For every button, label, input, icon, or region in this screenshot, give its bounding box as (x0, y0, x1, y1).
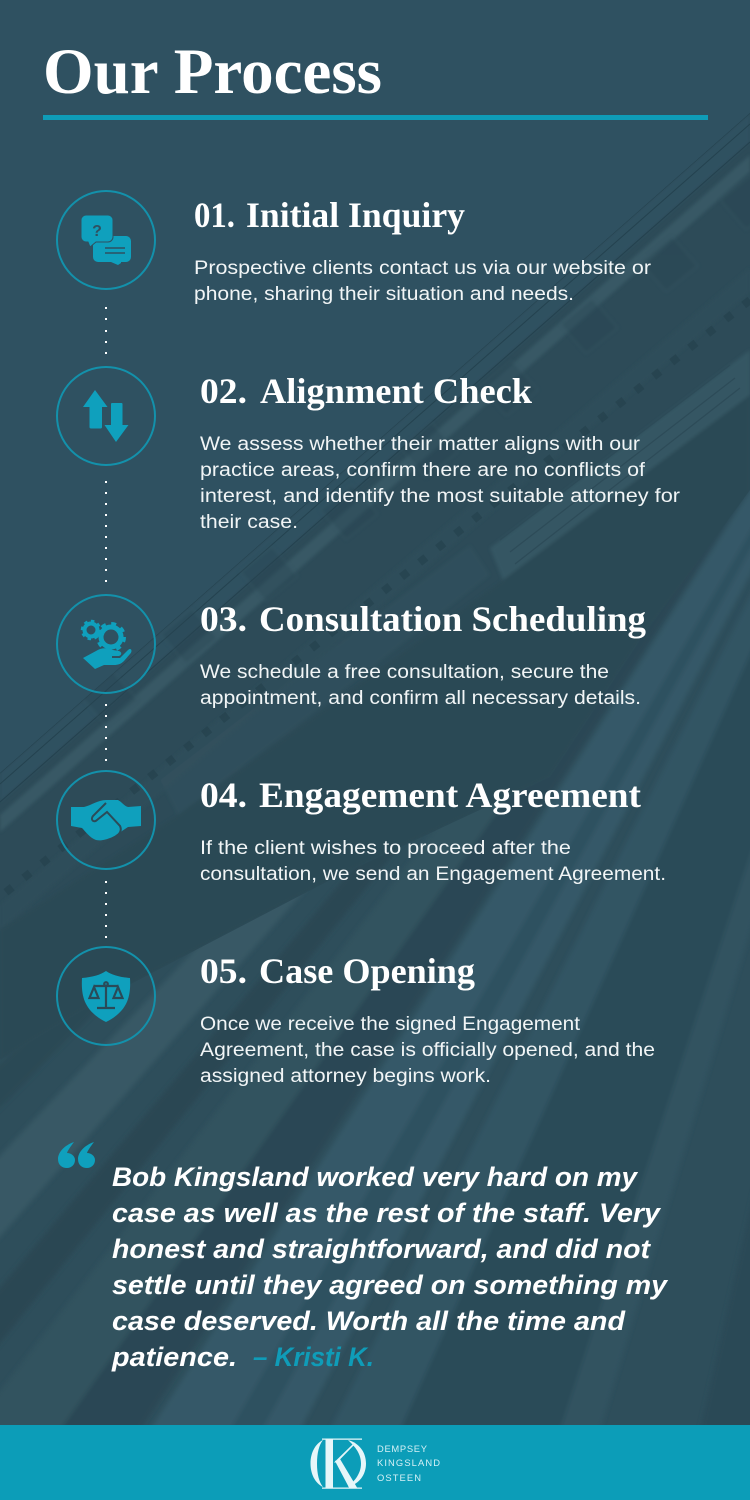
text 4: If the client wishes to proceed after the (200, 837, 571, 859)
text 2: We assess whether their matter aligns with our (200, 433, 641, 455)
text 4: consultation, we send an Engagement Agreement. (200, 863, 666, 885)
testimonial quote: honest and straightforward, and did not (112, 1234, 651, 1264)
step 1 (57, 191, 652, 305)
text 2: practice areas, confirm there are no conflicts of (200, 459, 646, 481)
heading 1: Initial Inquiry (246, 195, 465, 235)
text 4 (200, 837, 666, 885)
text 3: appointment, and confirm all necessary details. (200, 687, 641, 709)
heading 2: 02. (200, 371, 247, 411)
text 1: phone, sharing their situation and needs. (194, 283, 574, 305)
timeline dots (105, 307, 107, 938)
icon: speech bubbles: ? (92, 223, 102, 240)
text 3 (200, 661, 641, 709)
logo wordmark: DEMPSEY (377, 1443, 428, 1454)
title: Our Process (43, 36, 382, 108)
text 5: Agreement, the case is officially opened, and the (200, 1039, 655, 1061)
quote attribution: – Kristi K. (253, 1342, 374, 1372)
logo (310, 1438, 440, 1489)
heading 5: 05. (200, 951, 247, 991)
heading 3: 03. (200, 599, 247, 639)
logo wordmark: KINGSLAND (377, 1457, 440, 1468)
testimonial quote: case as well as the rest of the staff. Very (112, 1198, 662, 1228)
step 4 (57, 771, 666, 885)
icon: gears in hand (57, 595, 155, 693)
text 2: interest, and identify the most suitable attorney for (200, 485, 681, 507)
text 1: Prospective clients contact us via our website or (194, 257, 652, 279)
step 3 (57, 595, 646, 709)
testimonial quote (111, 1162, 669, 1372)
text 2 (200, 433, 681, 533)
testimonial quote: patience. (111, 1342, 237, 1372)
testimonial quote: case deserved. Worth all the time and (112, 1306, 626, 1336)
text 1 (194, 257, 652, 305)
icon: handshake (57, 771, 155, 869)
logo wordmark: OSTEEN (377, 1472, 421, 1483)
icon: quotation mark (58, 1142, 95, 1168)
step 2 (57, 367, 681, 533)
testimonial quote: Bob Kingsland worked very hard on my (112, 1162, 639, 1192)
logo wordmark (377, 1443, 440, 1483)
text 3: We schedule a free consultation, secure the (200, 661, 609, 683)
testimonial quote: settle until they agreed on something my (112, 1270, 669, 1300)
heading 3: Consultation Scheduling (259, 599, 646, 639)
heading 2: Alignment Check (260, 371, 532, 411)
icon: shield with scales (57, 947, 155, 1045)
icon: speech bubbles (57, 191, 155, 289)
text 2: their case. (200, 511, 298, 533)
text 5: Once we receive the signed Engagement (200, 1013, 581, 1035)
heading 4: Engagement Agreement (259, 775, 641, 815)
step 5 (57, 947, 655, 1087)
title rule (43, 115, 708, 120)
logo mark (310, 1438, 366, 1489)
heading 4: 04. (200, 775, 247, 815)
text 5: assigned attorney begins work. (200, 1065, 491, 1087)
icon: up and down arrows (57, 367, 155, 465)
heading 5: Case Opening (259, 951, 475, 991)
heading 1: 01. (194, 195, 235, 235)
text 5 (200, 1013, 655, 1087)
footer band (0, 1425, 750, 1500)
